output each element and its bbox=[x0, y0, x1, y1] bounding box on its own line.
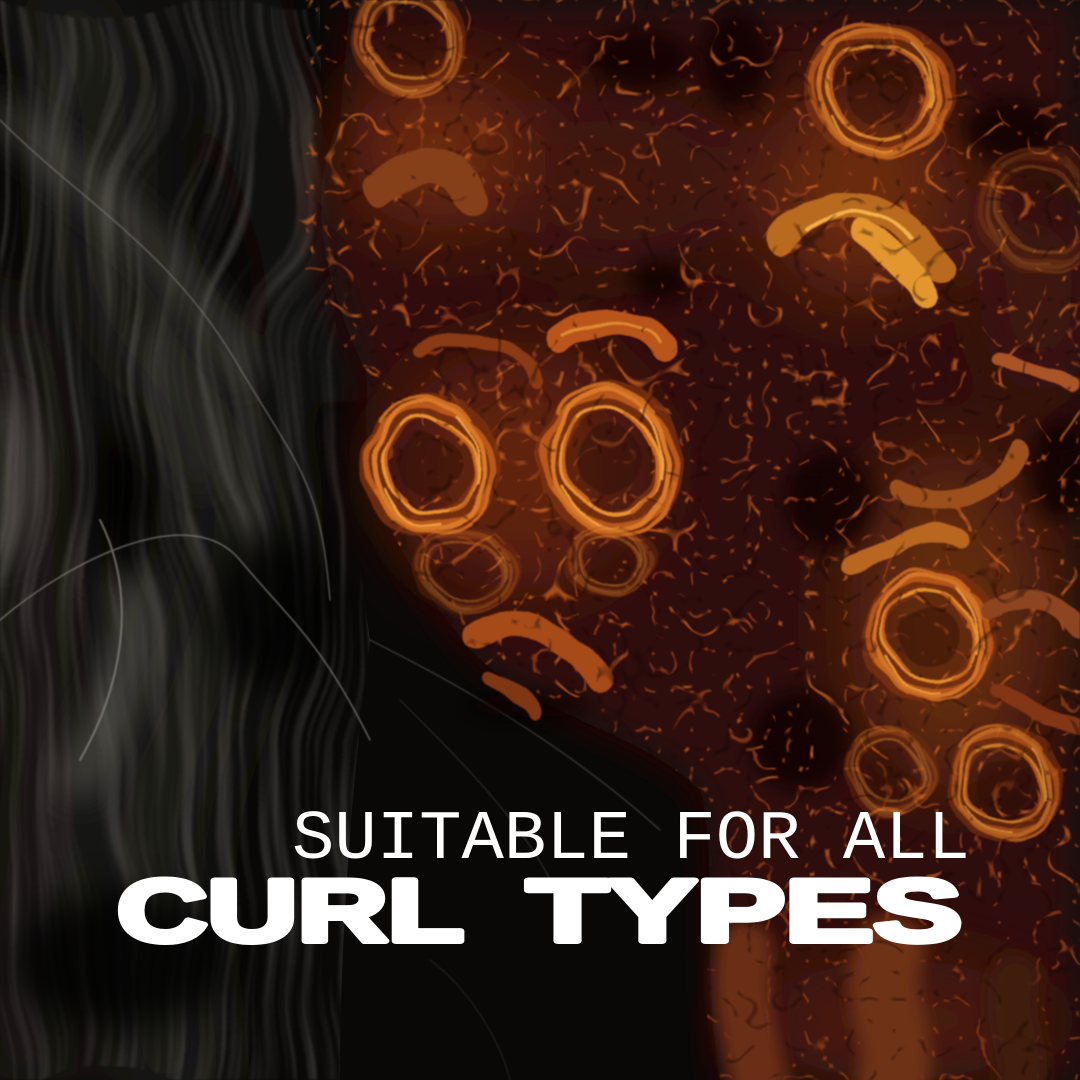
rope curls at the bottom right bbox=[742, 950, 1022, 1080]
dark shadows in the waves bbox=[10, 430, 330, 1030]
frizz strand texture bbox=[295, 0, 1080, 1080]
headline line 2: types: TYPES bbox=[527, 861, 962, 960]
curl ringlets bbox=[338, 0, 1080, 860]
bright orange highlight clumps bbox=[380, 165, 1080, 730]
headline line 1: suitable for all: SUITABLE FOR ALL bbox=[292, 801, 970, 880]
dark hair strand texture bbox=[0, 0, 370, 1080]
background photo: red curly hair mass bbox=[295, 0, 1080, 1080]
dark strand overlay bbox=[319, 0, 1080, 1080]
dark gaps between curls bbox=[470, 10, 1080, 790]
headline bbox=[117, 801, 970, 960]
headline line 2: curl: CURL bbox=[117, 861, 464, 960]
